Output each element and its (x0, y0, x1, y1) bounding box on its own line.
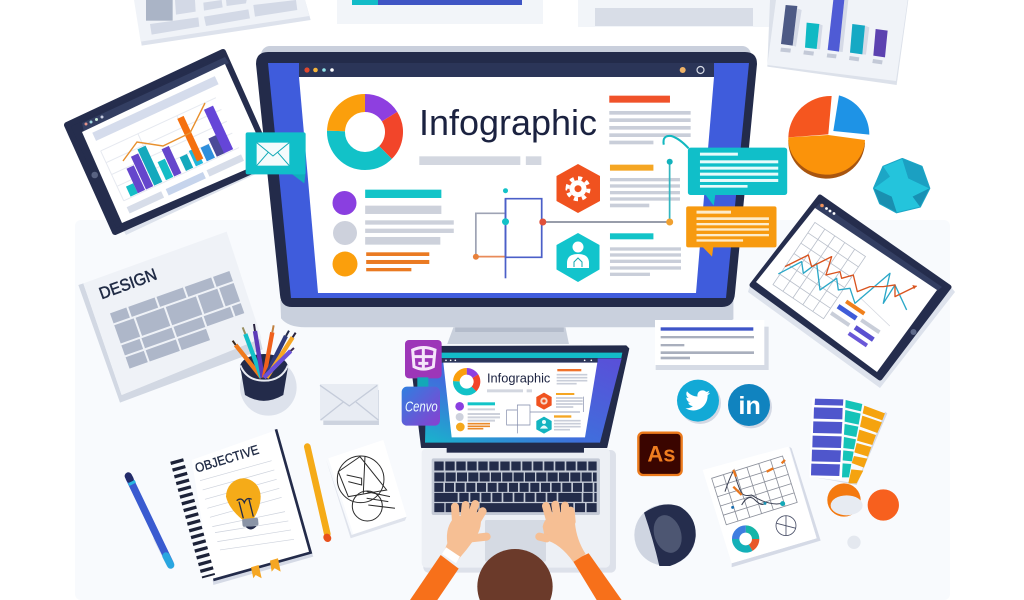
left sleeve (410, 555, 459, 600)
teal gem (874, 159, 929, 212)
left hand (443, 504, 487, 561)
design title: DESIGN (97, 265, 159, 303)
monitor blue screen (268, 63, 749, 298)
network diagram (473, 159, 673, 278)
left tablet with bar chart (65, 52, 275, 235)
notes paper (655, 320, 769, 370)
donut chart (324, 91, 406, 173)
design table (110, 271, 249, 369)
desktop monitor (256, 46, 757, 344)
teal chat bubble (663, 136, 787, 206)
screen page (299, 77, 714, 293)
monitor stand neck (447, 327, 569, 344)
purple app icon (405, 340, 442, 378)
laptop base (423, 450, 616, 573)
top left paper (134, 0, 311, 46)
right sleeve (573, 553, 622, 600)
pie chart (788, 95, 869, 179)
gear hexagon icon (556, 164, 600, 213)
trackpad (485, 520, 546, 562)
pencils (236, 331, 293, 378)
tablet body (67, 52, 272, 232)
monitor frame (256, 52, 757, 307)
mouse (634, 504, 696, 566)
top right bar chart paper (767, 0, 908, 85)
chart card (703, 447, 821, 567)
card curves (725, 460, 785, 508)
mini page content (455, 369, 587, 434)
line chart grid (773, 222, 914, 352)
pencil tips (233, 324, 296, 351)
twitter icon (677, 380, 721, 424)
page content bars (365, 96, 691, 276)
small colour dots (827, 483, 899, 549)
heading: Infographic (419, 102, 597, 143)
monitor back highlight (261, 46, 751, 70)
orange chat bubble (686, 206, 777, 257)
keyboard (434, 466, 597, 508)
tablet legend bars (826, 289, 894, 352)
grey envelope (320, 384, 379, 425)
notebook (177, 429, 313, 585)
canva app icon: Cenvo (405, 399, 438, 415)
tablet screen (82, 64, 268, 223)
monitor chin (280, 300, 733, 327)
yellow pencil (307, 447, 328, 538)
tablet chart bars (92, 76, 252, 214)
linkedin icon (728, 384, 772, 428)
right tablet with line chart (748, 197, 955, 388)
browser bar (299, 63, 714, 77)
notebook spiral (177, 460, 209, 577)
list bullets (332, 191, 358, 276)
right hand (539, 505, 586, 562)
sketch card (326, 440, 407, 538)
tablet body (752, 197, 949, 378)
light bulb (226, 478, 261, 529)
tablet screen (756, 208, 937, 372)
canva app icon (402, 377, 440, 426)
linkedin icon: in (738, 392, 761, 420)
mini donut (452, 367, 481, 396)
watch (442, 547, 460, 563)
card grid (712, 456, 797, 525)
hands and arms (410, 504, 622, 600)
top center paper (337, 0, 543, 24)
top right-center paper (578, 0, 770, 27)
chart lines (778, 255, 917, 310)
card pie outline (776, 516, 796, 536)
notebook title: OBJECTIVE (193, 442, 261, 476)
laptop heading: Infographic (487, 371, 550, 385)
laptop (409, 346, 629, 573)
colour swatches (809, 397, 887, 485)
laptop lid (409, 346, 629, 447)
person hexagon icon (556, 233, 600, 282)
tablet trend line (123, 103, 205, 161)
pencil cup (233, 324, 297, 416)
blue pen (128, 476, 171, 565)
sketch drawing (337, 456, 395, 521)
bookmarks (251, 558, 281, 578)
teal mail bubble (246, 132, 306, 183)
envelope icon (257, 143, 289, 166)
adobe animate icon: As (647, 442, 675, 467)
card donut (732, 525, 759, 553)
design sheet (78, 232, 263, 403)
hair (477, 549, 553, 600)
adobe animate icon (638, 433, 682, 475)
